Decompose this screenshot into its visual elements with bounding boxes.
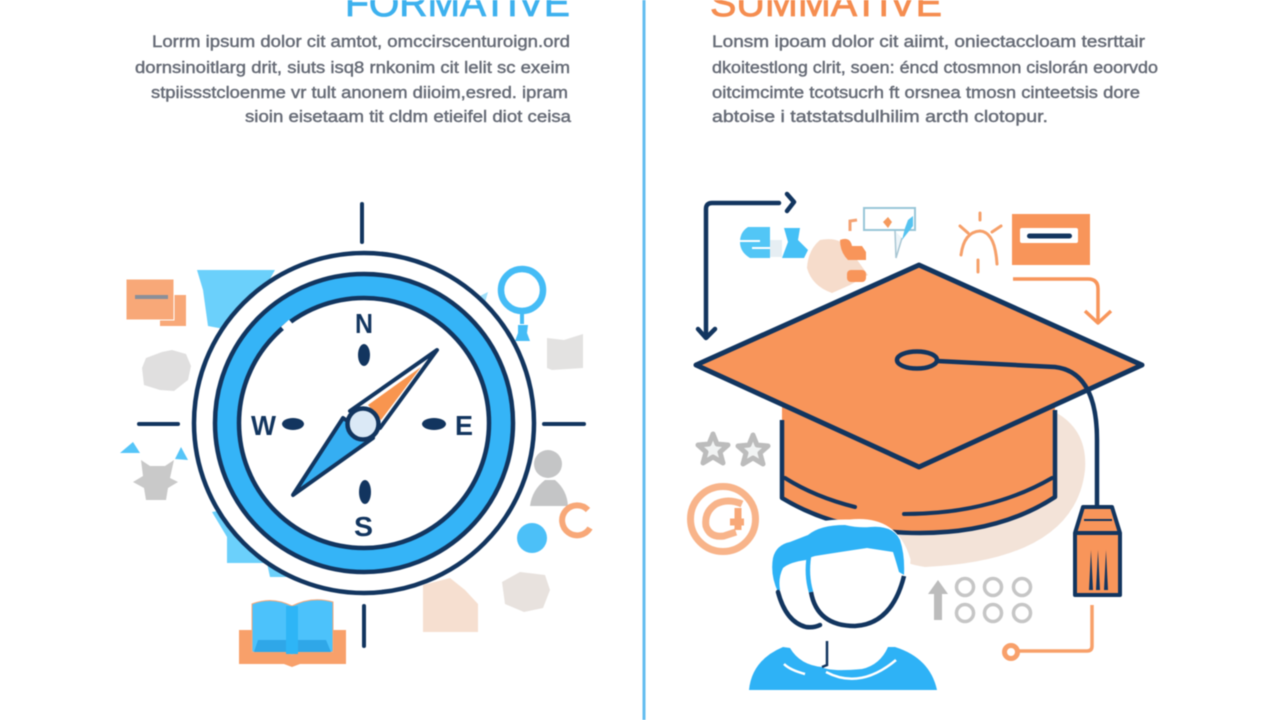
panel: formative [120,0,590,667]
graduation cap [696,265,1142,595]
text block: formative description: dornsinoitlarg drit, siuts isq8 rnkonim cit lelit sc exeim [135,58,570,77]
hair halo [773,522,907,590]
arrow: orange connector [1004,605,1092,658]
compass letter S: S [354,511,373,542]
icon: grey up arrow [928,580,948,620]
panel: summative [690,0,1158,690]
text block: summative description: Lonsm ipoam dolor cit aiimt, oniectaccloam tesrttair [712,32,1145,51]
icon: grey bug with blue wings [120,442,188,500]
text block: summative description [712,32,1158,126]
beige shadow blob [870,412,1085,567]
icon: speech box [850,208,915,258]
arrow: orange elbow [1013,279,1111,323]
text block: formative description [135,32,572,126]
tassel cord with button [897,352,1097,506]
icon: at sign [690,486,756,552]
text block: formative description: Lorrm ipsum dolor cit amtot, omccirscenturoign.ord [152,32,570,51]
center divider [642,0,646,720]
arrow: navy elbow [698,194,794,338]
neck line [822,641,827,667]
text block: summative description: abtoise i tatstatsdulhilim arcth clotopur. [712,107,1048,126]
person [749,522,937,690]
icon: blue cluster [740,227,808,258]
text block: formative description: sioin eisetaam tit cldm etieifel diot ceisa [245,107,572,126]
compass letter W: W [251,410,277,441]
compass tick marks [139,204,584,646]
icon: open book on orange base [239,600,346,667]
cap base [782,400,1055,533]
compass blue ring [227,286,501,560]
tassel [1075,507,1120,595]
text block: formative description: stpiissstcloenme vr tult anonem diioim,esred. ipram [151,83,568,102]
icon: blue shape bottom left [212,505,300,577]
icon: beige document [423,578,478,632]
compass direction marks [282,344,446,504]
icon: grey stars [698,434,768,464]
compass letter E: E [455,410,473,441]
icon: light bulb rays [960,213,1001,272]
shoulders [749,647,937,690]
icon: magnifier [480,269,543,341]
compass outer ring [194,253,534,593]
cap band lines [785,478,1052,514]
icon: grey circles grid [956,578,1030,622]
text block: summative description: oitcimcimte tcotsucrh ft orsnea tmosn cinteetsis dore [712,83,1140,102]
face blue edge [808,556,811,592]
icon: blue dot [517,523,547,553]
icon: orange message box [1012,214,1090,265]
face outline [811,576,904,626]
compass needle [293,350,437,495]
compass letter N: N [355,308,373,339]
compass [139,204,584,646]
icon: grey book [547,334,583,370]
icon: beige hand blob [807,239,868,293]
back of head outline [778,592,820,627]
icon: orange chat bubbles [126,279,186,326]
collar highlights [784,660,896,679]
mortarboard [696,265,1142,467]
icon: blue shape top left [197,270,275,332]
text block: summative description: dkoitestlong clrit, soen: éncd ctosmnon cislorán eoorvdo [712,58,1158,77]
icon: grey person [530,450,568,506]
hair [772,525,904,592]
icon: grey blob lower right [502,572,550,612]
icon: orange refresh ring [562,505,590,535]
ring outlines [215,274,513,572]
ring highlight gap [283,322,291,329]
icon: grey blob [142,350,191,391]
